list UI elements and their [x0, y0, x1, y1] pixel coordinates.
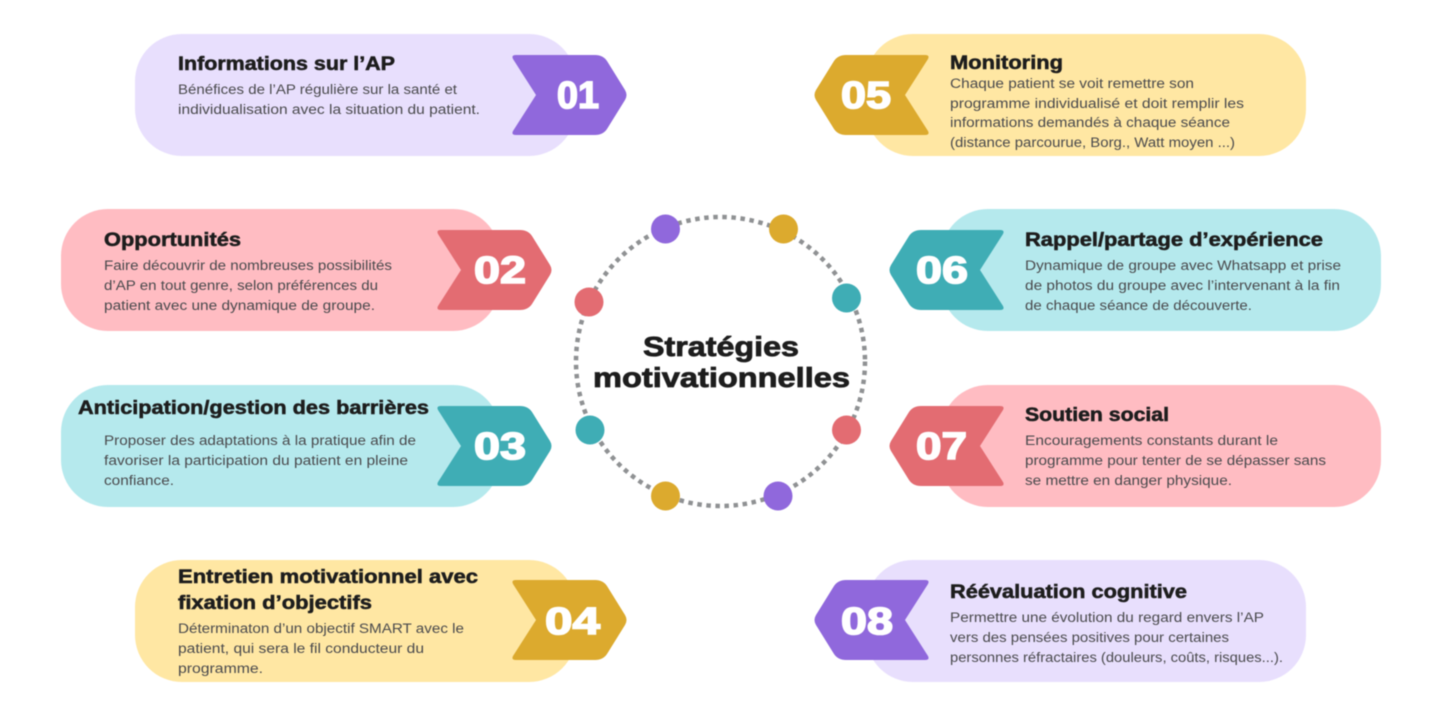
- body text 08: Permettre une évolution du regard envers l’AP: [950, 610, 1264, 625]
- number arrow 07: [890, 406, 1004, 486]
- number arrow 05: [814, 55, 929, 135]
- pill background 08: [866, 560, 1306, 682]
- title: [593, 331, 850, 393]
- body text 05: Chaque patient se voit remettre son: [950, 76, 1194, 91]
- number arrow 03: [437, 406, 552, 486]
- heading 02: Opportunités: [104, 229, 241, 251]
- body text 04: programme.: [178, 661, 263, 676]
- number arrow 01: [512, 55, 626, 135]
- body text 06: Dynamique de groupe avec Whatsapp et prise: [1025, 258, 1341, 273]
- body text 07: Encouragements constants durant le: [1025, 433, 1278, 448]
- body text 01: Bénéfices de l’AP régulière sur la santé et: [178, 82, 457, 97]
- number arrow 08: [814, 580, 929, 660]
- heading 03: Anticipation/gestion des barrières: [78, 397, 429, 419]
- pill background 01: [135, 34, 576, 156]
- panel: 03 Anticipation/gestion des barrières: [61, 385, 552, 507]
- pill background 02: [61, 209, 500, 331]
- number arrow 07: 07: [916, 426, 967, 468]
- body text 05: (distance parcourue, Borg., Watt moyen ...): [950, 135, 1235, 150]
- pill background 06: [941, 209, 1381, 331]
- body text 06: [1025, 258, 1341, 313]
- body text 04: Déterminaton d’un objectif SMART avec le: [178, 621, 464, 636]
- body text 03: [104, 433, 416, 488]
- body text 05: informations demandés à chaque séance: [950, 115, 1230, 130]
- body text 06: de photos du groupe avec l’intervenant à la fin: [1025, 278, 1340, 293]
- panel: 08 Réévaluation cognitive: [814, 560, 1306, 682]
- body text 03: favoriser la participation du patient en pleine: [104, 453, 408, 468]
- pill background 05: [866, 34, 1306, 156]
- panel: 01 Informations sur l'AP: [135, 34, 626, 156]
- body text 05: [950, 76, 1244, 150]
- body text 02: [104, 258, 392, 313]
- number arrow 04: 04: [545, 601, 600, 643]
- number arrow 02: 02: [474, 250, 526, 292]
- heading 08: Réévaluation cognitive: [950, 581, 1187, 603]
- heading 04: fixation d’objectifs: [178, 592, 372, 614]
- panel: 06 Rappel/partage d'expérience: [890, 209, 1381, 331]
- pill background 03: [61, 385, 500, 507]
- body text 02: Faire découvrir de nombreuses possibilités: [104, 258, 392, 273]
- heading 05: Monitoring: [950, 52, 1063, 74]
- body text 02: patient avec une dynamique de groupe.: [104, 298, 375, 313]
- heading 04: [178, 566, 478, 614]
- body text 01: [178, 82, 480, 117]
- body text 03: Proposer des adaptations à la pratique afin de: [104, 433, 416, 448]
- heading 01: Informations sur l’AP: [178, 53, 395, 75]
- body text 07: se mettre en danger physique.: [1025, 473, 1232, 488]
- body text 07: programme pour tenter de se dépasser sans: [1025, 453, 1326, 468]
- number arrow 06: 06: [916, 250, 968, 292]
- number arrow 01: 01: [557, 75, 599, 117]
- body text 04: patient, qui sera le fil conducteur du: [178, 641, 424, 656]
- central dotted ring with coloured dots: [574, 214, 865, 510]
- body text 08: personnes réfractaires (douleurs, coûts, risques...).: [950, 650, 1283, 665]
- body text 02: d’AP en tout genre, selon préférences du: [104, 278, 378, 293]
- panel: 07 Soutien social: [890, 385, 1381, 507]
- title: motivationnelles: [593, 362, 850, 393]
- number arrow 06: [890, 230, 1004, 310]
- number arrow 05: 05: [841, 75, 891, 117]
- body text 01: individualisation avec la situation du patient.: [178, 102, 480, 117]
- pill background 04: [135, 560, 576, 682]
- body text 03: confiance.: [104, 473, 174, 488]
- body text 06: de chaque séance de découverte.: [1025, 298, 1252, 313]
- pill background 07: [941, 385, 1381, 507]
- heading 04: Entretien motivationnel avec: [178, 566, 478, 588]
- heading 06: Rappel/partage d’expérience: [1025, 229, 1323, 251]
- title: Stratégies: [643, 331, 799, 362]
- panel: 05 Monitoring: [814, 34, 1306, 156]
- body text 04: [178, 621, 464, 676]
- body text 08: [950, 610, 1283, 665]
- number arrow 08: 08: [841, 601, 893, 643]
- panel: 04 Entretien motivationnel: [135, 560, 626, 682]
- body text 05: programme individualisé et doit remplir les: [950, 96, 1244, 111]
- number arrow 02: [437, 230, 552, 310]
- heading 07: Soutien social: [1025, 404, 1169, 426]
- body text 07: [1025, 433, 1326, 488]
- number arrow 04: [512, 580, 626, 660]
- body text 08: vers des pensées positives pour certaines: [950, 630, 1229, 645]
- panel: 02 Opportunités: [61, 209, 552, 331]
- number arrow 03: 03: [474, 426, 526, 468]
